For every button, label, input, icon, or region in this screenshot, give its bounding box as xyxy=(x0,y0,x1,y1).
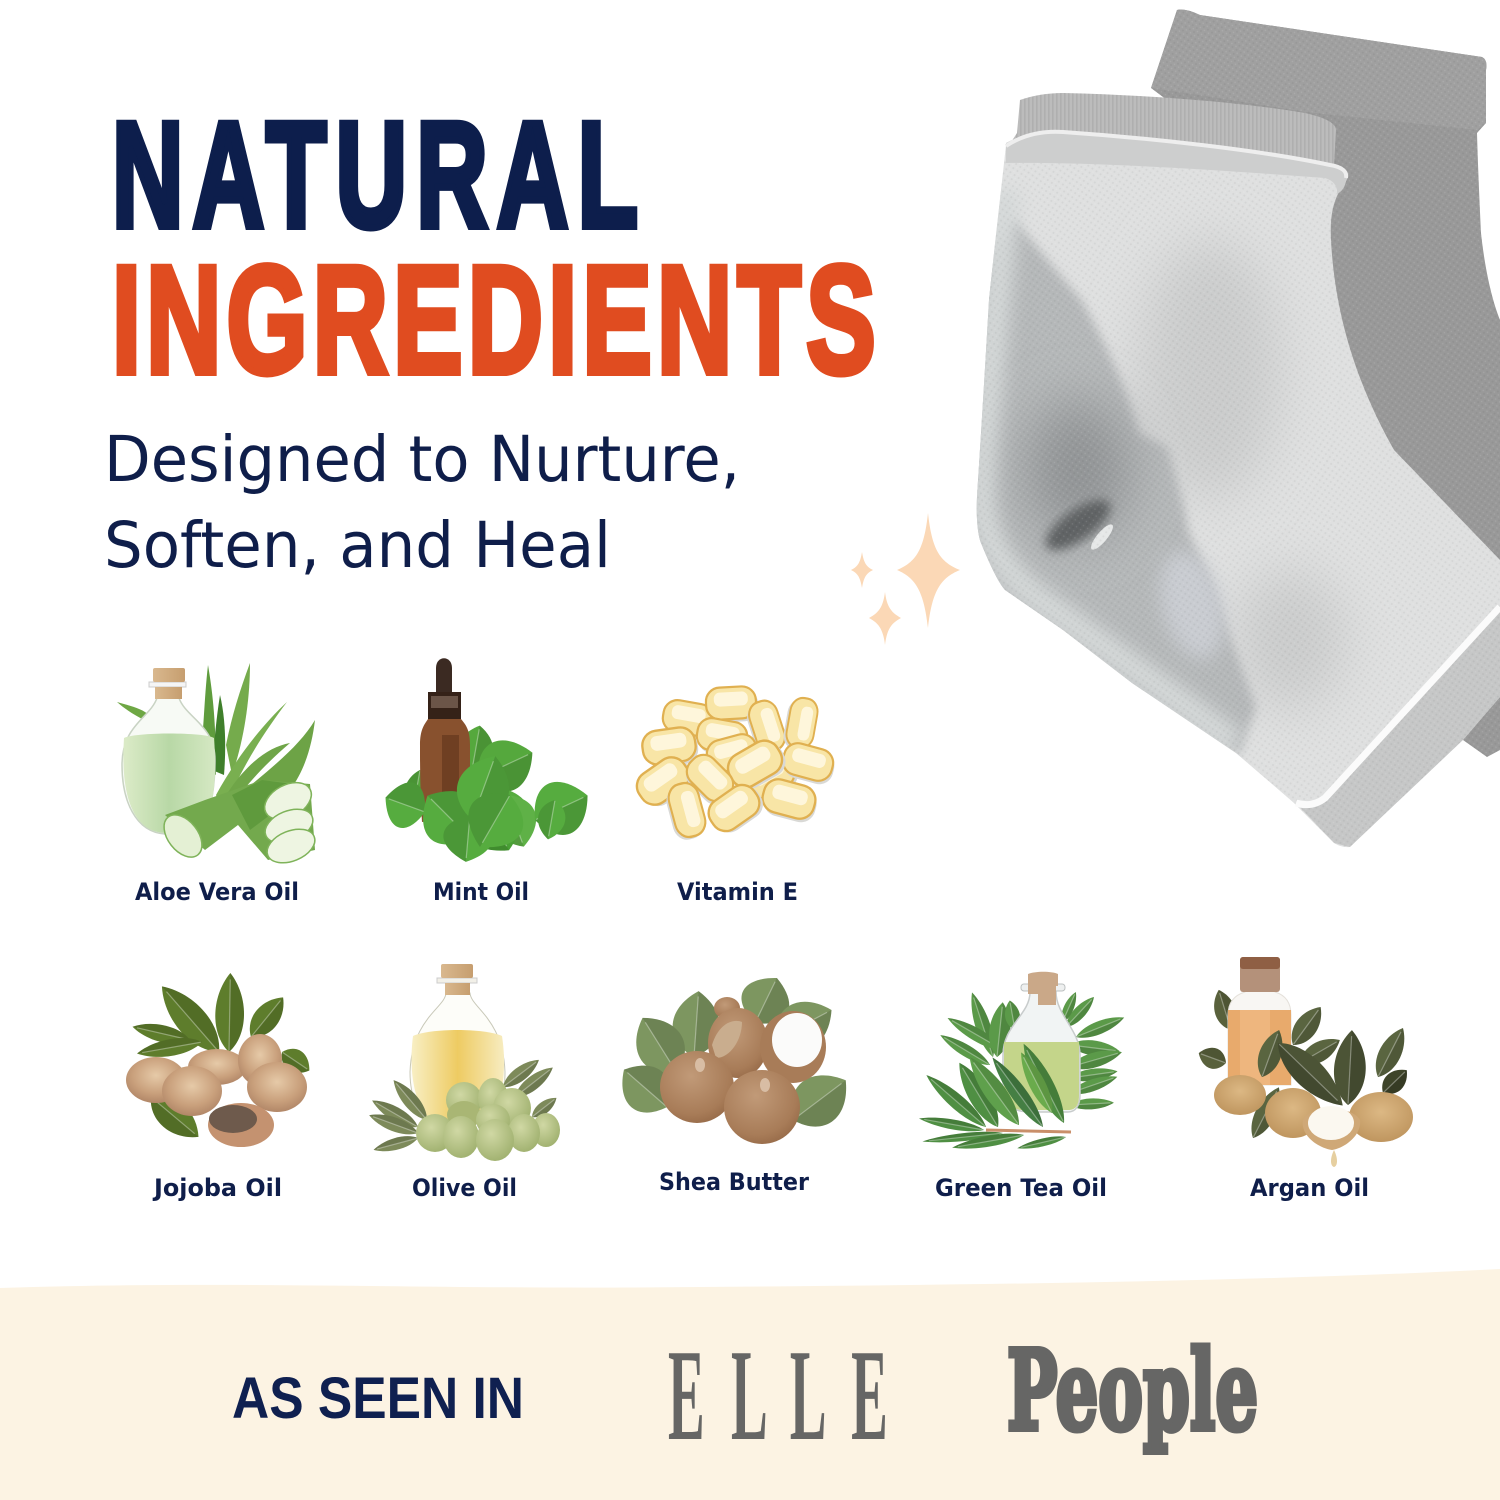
icon: aloe bottle and leaves xyxy=(117,663,320,869)
label: Vitamin E xyxy=(677,878,798,906)
label: Argan Oil xyxy=(1250,1174,1369,1202)
panel: as seen in banner xyxy=(0,1269,1500,1500)
back sock xyxy=(1151,10,1500,757)
ingredient: mint oil xyxy=(377,658,599,906)
icon: olive oil bottle and olives xyxy=(367,964,560,1161)
front sock xyxy=(970,93,1500,860)
ingredient: aloe vera oil xyxy=(117,663,320,906)
title: INGREDIENTS xyxy=(112,235,876,405)
icon: dropper bottle and mint xyxy=(377,658,599,864)
ingredient: olive oil xyxy=(367,964,560,1202)
icon: jojoba nuts and leaves xyxy=(126,973,316,1148)
icon: shea nuts and leaves xyxy=(609,967,861,1144)
ingredient: shea butter xyxy=(609,967,861,1196)
logo: people: People xyxy=(1007,1326,1258,1455)
label: Green Tea Oil xyxy=(935,1174,1107,1202)
label: Olive Oil xyxy=(412,1174,517,1202)
ingredient: argan oil xyxy=(1195,957,1414,1202)
title xyxy=(112,91,876,405)
ingredient: green tea oil xyxy=(918,972,1127,1202)
icon: sparkles xyxy=(851,513,960,645)
icon: softgel capsules xyxy=(631,686,838,843)
subtitle: Designed to Nurture, xyxy=(104,423,740,496)
logo: elle: ELLE xyxy=(668,1322,888,1468)
label: Shea Butter xyxy=(659,1168,809,1196)
label: Aloe Vera Oil xyxy=(135,878,299,906)
label: Mint Oil xyxy=(433,878,529,906)
heading: as seen in: AS SEEN IN xyxy=(232,1366,524,1431)
product photo: heel socks xyxy=(970,10,1500,860)
icon: argan jar, leaves and nuts xyxy=(1195,957,1414,1167)
ingredient: vitamin e xyxy=(631,686,838,906)
icon: tea tree bottle and leaves xyxy=(918,972,1127,1153)
subtitle xyxy=(104,423,740,582)
label: Jojoba Oil xyxy=(152,1174,282,1202)
ingredient: jojoba oil xyxy=(126,973,316,1202)
title: NATURAL xyxy=(112,91,638,258)
subtitle: Soften, and Heal xyxy=(104,509,611,582)
